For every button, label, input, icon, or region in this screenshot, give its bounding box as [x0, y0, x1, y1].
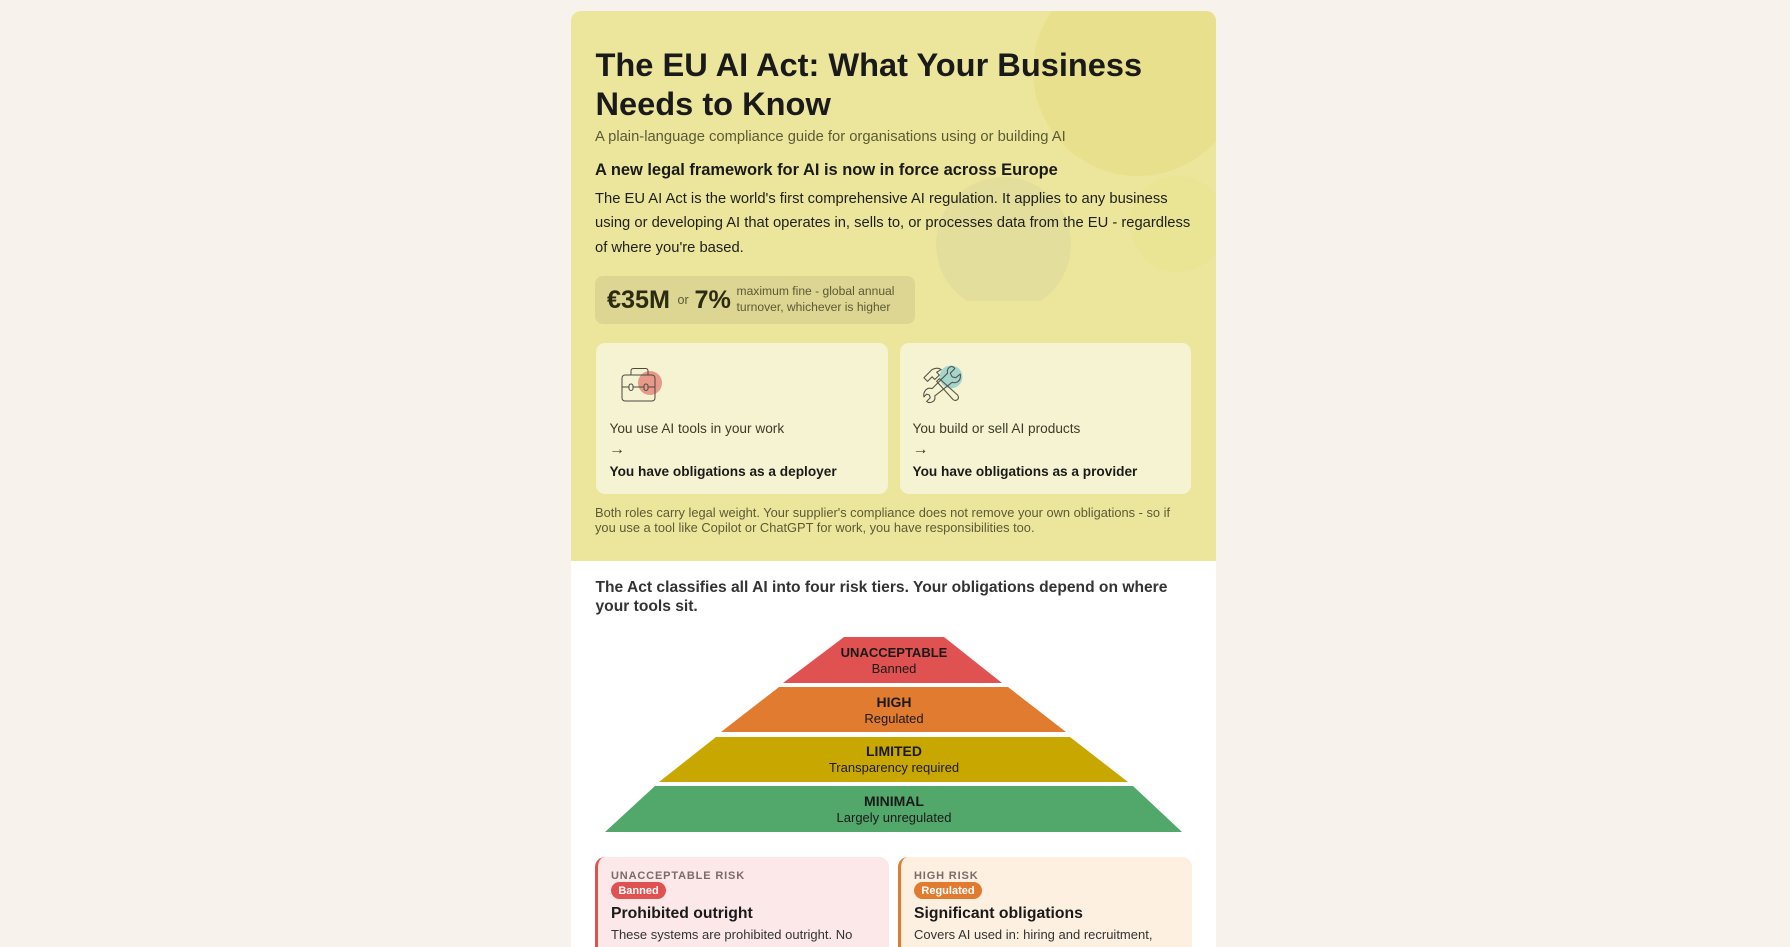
chart: risk pyramid — [605, 637, 1182, 832]
panel: deployer card — [596, 343, 888, 494]
note: both roles: Both roles carry legal weight. Your supplier's compliance does not remove your own obligations - so if — [595, 505, 1170, 520]
badge: banned — [611, 882, 666, 899]
label: high — [864, 694, 924, 726]
intro text: using or developing AI that operates in, sells to, or processes data from the EU - regardless — [595, 215, 1190, 231]
note: both roles — [595, 505, 1170, 535]
tier label: UNACCEPTABLE RISK — [611, 870, 745, 882]
or: or — [678, 292, 689, 306]
label: minimal: Largely unregulated — [837, 810, 951, 824]
label: high: Regulated — [864, 710, 924, 726]
heading: legal framework: A new legal framework for AI is now in force across Europe — [595, 161, 1058, 179]
provider text: You build or sell AI products — [912, 421, 1080, 436]
tier: unacceptable — [783, 637, 1002, 683]
icon: hammer and wrench — [923, 366, 962, 404]
label: minimal: MINIMAL — [864, 793, 924, 809]
card heading: Significant obligations — [914, 905, 1083, 922]
fine note — [736, 284, 894, 314]
badge: regulated: Regulated — [921, 885, 975, 897]
fine percentage: 7% — [694, 286, 731, 314]
fine amount: €35M — [607, 286, 670, 314]
label: limited — [829, 743, 959, 774]
note: both roles: you use a tool like Copilot or ChatGPT for work, you have responsibilities too. — [595, 520, 1035, 535]
deployer obligation: You have obligations as a deployer — [610, 464, 837, 479]
fine note: turnover, whichever is higher — [736, 300, 890, 314]
tier: high — [721, 687, 1066, 732]
panel: unacceptable risk — [595, 857, 889, 947]
fine note: maximum fine - global annual — [736, 284, 894, 298]
panel: yellow hero — [571, 11, 1216, 561]
label: limited: LIMITED — [866, 743, 922, 759]
intro text — [595, 190, 1190, 256]
label: limited: Transparency required — [829, 760, 959, 774]
title: The EU AI Act: What Your Business — [596, 46, 1142, 83]
subtitle: A plain-language compliance guide for organisations using or building AI — [595, 129, 1066, 145]
arrow: → — [912, 441, 928, 458]
tier label: HIGH RISK — [914, 870, 978, 882]
card text: Covers AI used in: hiring and recruitment, — [914, 927, 1152, 942]
callout: maximum fine — [595, 276, 915, 324]
tier: minimal — [605, 786, 1182, 832]
title: Needs to Know — [596, 85, 831, 122]
badge: banned: Banned — [618, 885, 659, 897]
icon: briefcase — [622, 368, 662, 402]
panel: white page card — [571, 11, 1216, 947]
arrow: → — [609, 441, 625, 458]
panel: provider card — [900, 343, 1191, 494]
label: unacceptable — [841, 645, 947, 676]
intro text: of where you're based. — [595, 240, 744, 256]
section heading — [596, 579, 1167, 614]
deployer text: You use AI tools in your work — [610, 421, 784, 436]
panel: high risk — [898, 857, 1192, 947]
section heading: your tools sit. — [596, 598, 698, 614]
card text: These systems are prohibited outright. No — [611, 927, 852, 942]
title — [596, 46, 1142, 122]
intro text: The EU AI Act is the world's first comprehensive AI regulation. It applies to any business — [595, 190, 1168, 206]
provider obligation: You have obligations as a provider — [912, 464, 1137, 479]
label: unacceptable: Banned — [872, 660, 916, 676]
tier: limited — [659, 737, 1128, 782]
label: unacceptable: UNACCEPTABLE — [841, 645, 947, 660]
section heading: The Act classifies all AI into four risk tiers. Your obligations depend on where — [596, 579, 1167, 596]
card heading: Prohibited outright — [611, 905, 753, 922]
badge: regulated — [914, 882, 982, 899]
label: high: HIGH — [876, 694, 912, 710]
label: minimal — [837, 793, 951, 824]
